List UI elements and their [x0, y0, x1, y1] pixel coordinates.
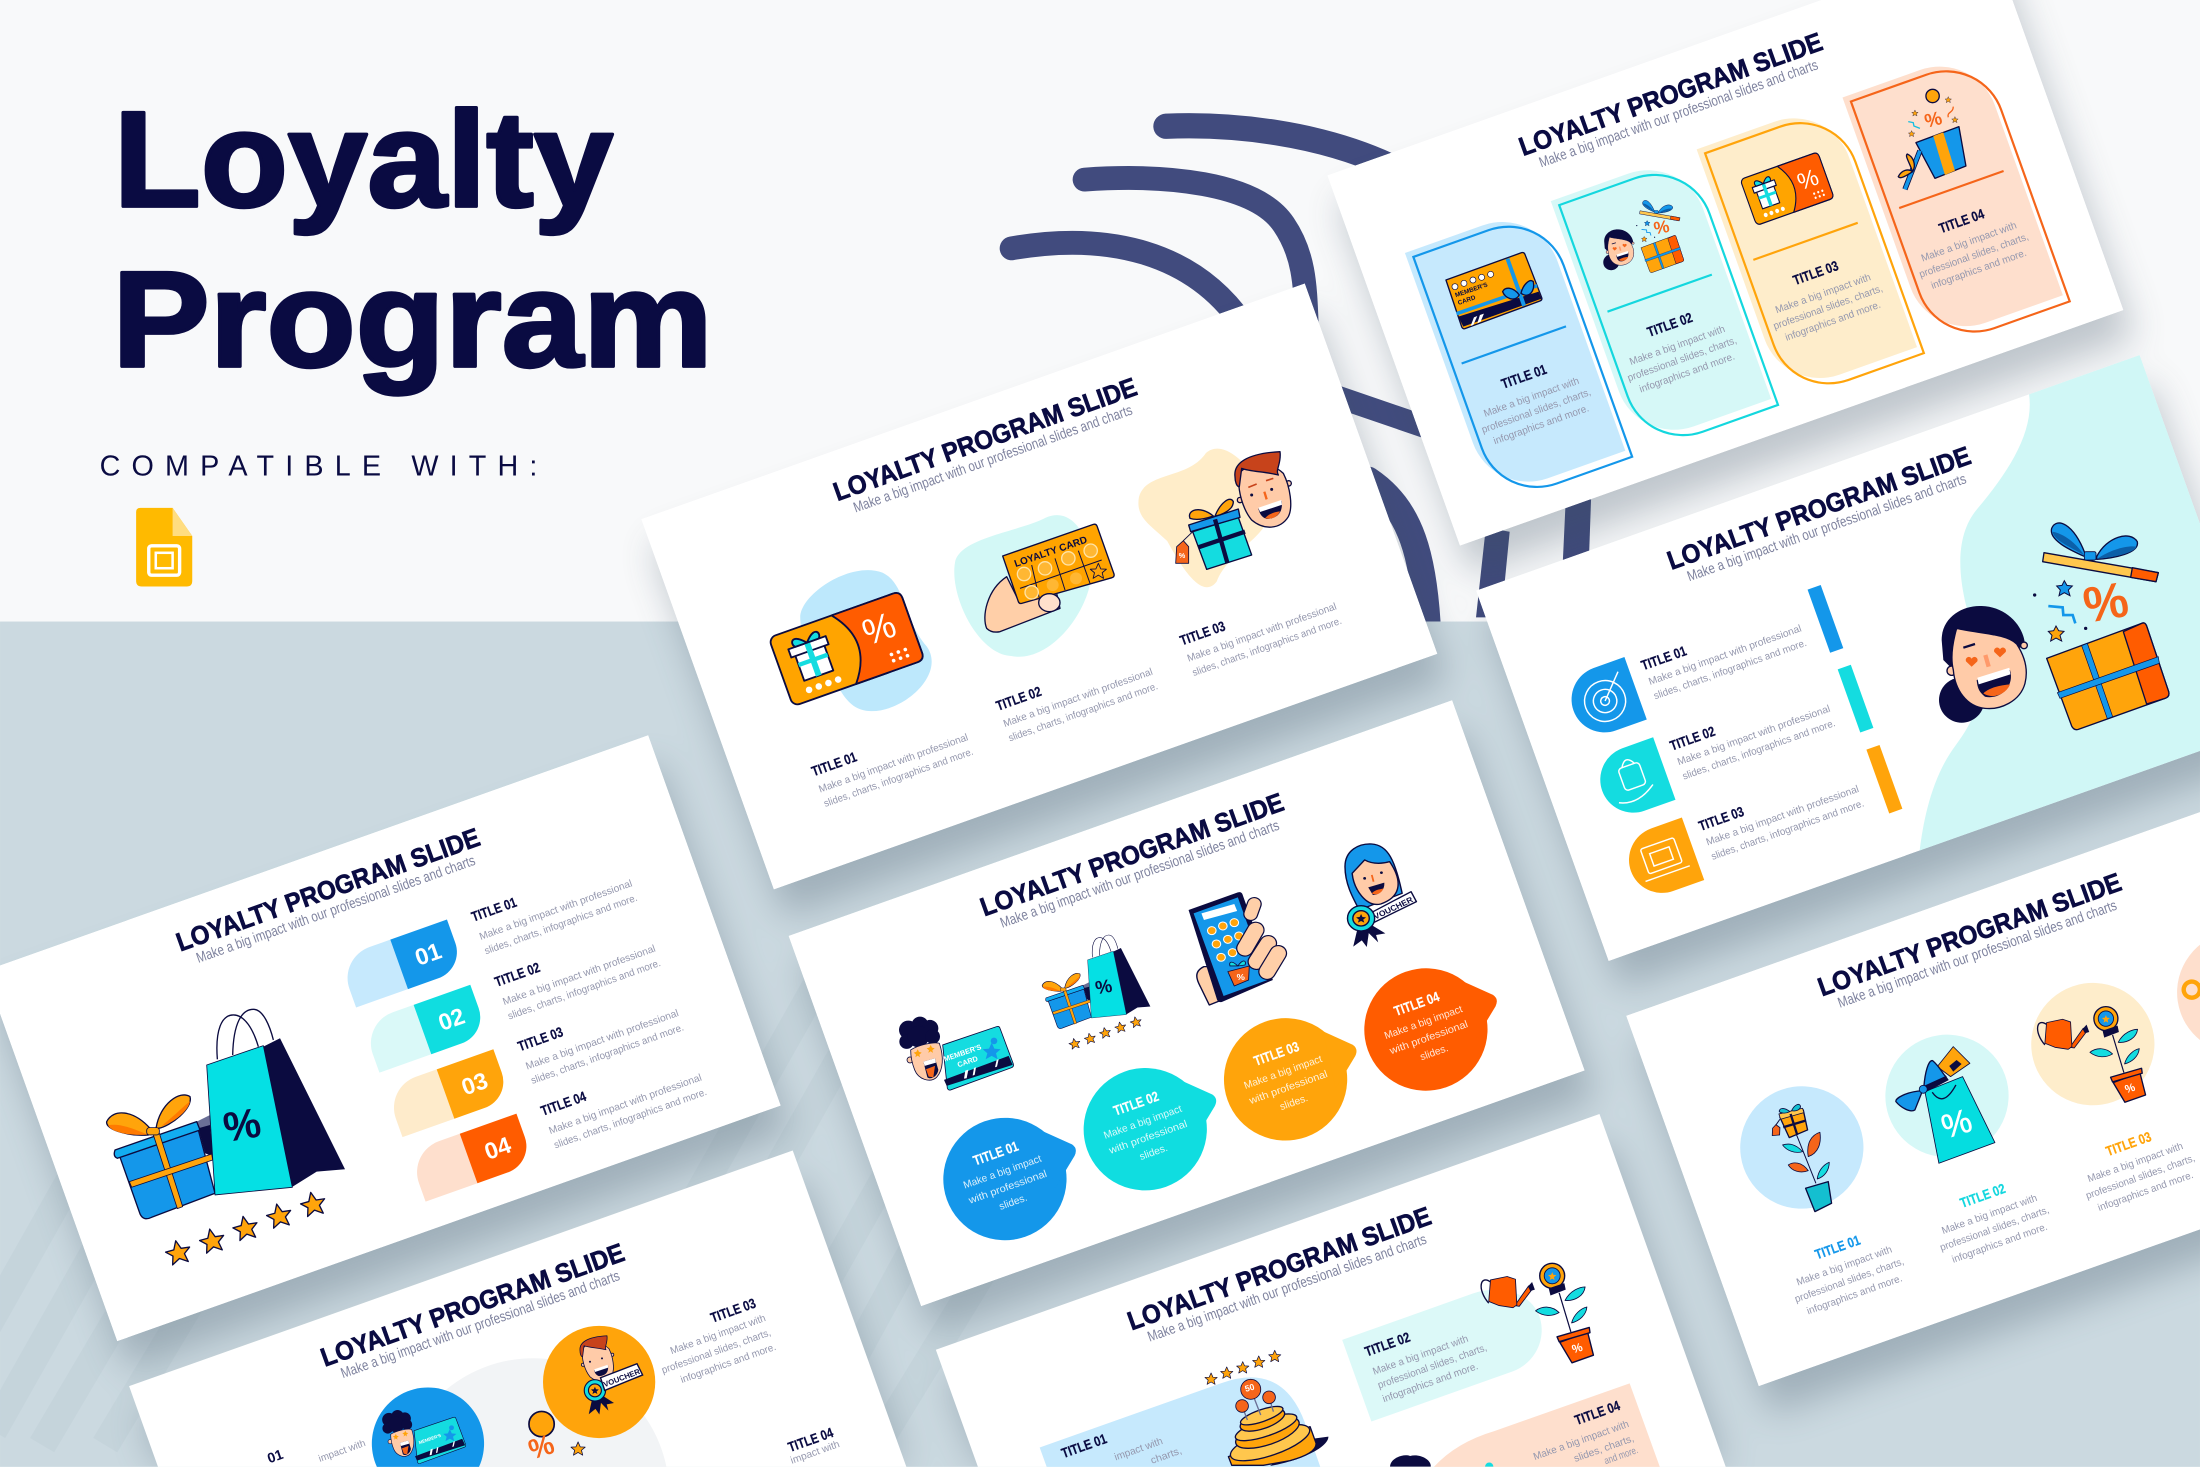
card 1: Make a big impact with	[1482, 376, 1581, 420]
heading: LOYALTY PROGRAM SLIDE	[1123, 1201, 1435, 1336]
panel: slide C list with woman and gift	[1476, 355, 2200, 961]
card 2	[1550, 170, 1780, 436]
icon: opening gift: %	[1923, 108, 1945, 133]
text: title 02: TITLE 02	[994, 683, 1044, 714]
list row 2: Make a big impact with professional	[501, 944, 657, 1008]
icon: member card: CARD	[1457, 294, 1477, 307]
card 3	[1696, 118, 1926, 384]
background: lower band	[0, 622, 2200, 1467]
text: title 01: slides, charts, infographics and more.	[823, 747, 975, 810]
icon: voucher man	[580, 1336, 614, 1381]
text: title 04	[784, 1423, 842, 1467]
text: title 01: professional slides, charts,	[1793, 1256, 1906, 1305]
card 2: TITLE 02	[1645, 309, 1695, 340]
illustration: watering can and flower	[1481, 1263, 1593, 1363]
bubble 1: TITLE 01	[971, 1138, 1021, 1168]
heading: Make a big impact with our professional slides and charts	[339, 1268, 622, 1382]
icon: member card: MEMBER'S	[1454, 282, 1489, 299]
bubble 1: with professional	[966, 1169, 1049, 1207]
row 1	[1561, 585, 1844, 742]
list row 4: 04	[481, 1132, 514, 1165]
card 3: professional slides, charts,	[1772, 284, 1884, 332]
heading: Make a big impact with our professional slides and charts	[194, 853, 478, 967]
bubble 1	[943, 1118, 1076, 1240]
panel 4 text: slides, charts,	[1573, 1433, 1636, 1465]
bubble 4: Make a big impact	[1383, 1004, 1464, 1042]
text: title 04: TITLE 04	[786, 1424, 836, 1455]
bubble 4: with professional	[1387, 1019, 1470, 1057]
circle 2	[1868, 1018, 2026, 1174]
ring fragment	[2181, 979, 2200, 1000]
bubble 3: TITLE 03	[1251, 1038, 1301, 1069]
bubble 3: slides.	[1279, 1093, 1310, 1113]
amber circle	[543, 1326, 655, 1438]
list row 1: Make a big impact with professional	[478, 878, 634, 943]
text: title 03: infographics and more.	[679, 1342, 778, 1386]
heading: Make a big impact with our professional slides and charts	[1836, 898, 2119, 1012]
heading: Make a big impact with our professional slides and charts	[1685, 471, 1969, 585]
icon: google slides	[136, 508, 192, 586]
icon: gift box with bow and percent	[2033, 523, 2169, 730]
heading: Make a big impact with our professional slides and charts	[851, 403, 1135, 516]
row 1: TITLE 01	[1639, 642, 1689, 673]
slide background	[936, 1114, 1726, 1467]
bubble 2: slides.	[1138, 1143, 1169, 1163]
text fragment: title 01: 01	[265, 1446, 285, 1466]
heading: LOYALTY PROGRAM SLIDE	[976, 787, 1288, 922]
compatible with label: COMPATIBLE WITH:	[100, 451, 537, 483]
row 3: Make a big impact with professional	[1705, 784, 1861, 848]
card 1: TITLE 01	[1499, 361, 1549, 392]
panel 2 text block: infographics and more.	[1381, 1361, 1480, 1405]
panel: slide E numbered list with bag	[0, 735, 781, 1341]
text: title 03: TITLE 03	[1178, 618, 1227, 648]
icon: phone in hand	[1189, 892, 1278, 1005]
list row 2: 02	[435, 1003, 468, 1036]
bubble 2	[1084, 1068, 1216, 1190]
text: title 01: TITLE 01	[1813, 1232, 1862, 1262]
row 3: slides, charts, infographics and more.	[1710, 798, 1866, 863]
heading: LOYALTY PROGRAM SLIDE	[172, 822, 484, 957]
illustration: gift and shopping bag with stars	[107, 1009, 345, 1266]
text fragment: title 01	[265, 1438, 367, 1466]
bubble 4: slides.	[1419, 1043, 1450, 1063]
title: Program	[112, 243, 713, 395]
illustration: watering can and flower	[2038, 1007, 2146, 1102]
mint blob	[1920, 355, 2200, 850]
panel 1 text: TITLE 01	[1059, 1430, 1109, 1461]
icon: hand holding loyalty card	[985, 524, 1114, 632]
illustration: gift and shopping bag with stars: %	[220, 1098, 264, 1151]
panel 4 text	[1524, 1396, 1640, 1467]
panel 4 text: and more.	[1603, 1445, 1640, 1467]
panel 1 text	[1059, 1408, 1183, 1467]
smiley and percent burst: %	[525, 1428, 558, 1465]
card 2: professional slides, charts,	[1626, 335, 1738, 384]
list row 3: Make a big impact with professional	[524, 1008, 680, 1072]
card 3: TITLE 03	[1791, 257, 1841, 288]
panel: slide B four cards	[1327, 0, 2123, 546]
circle 4	[2160, 914, 2200, 1071]
list row 2: slides, charts, infographics and more.	[507, 958, 662, 1022]
panel: slide A three icons	[641, 283, 1437, 890]
text: title 03: Make a big impact with	[2086, 1141, 2185, 1185]
illustration: cake and stars: 50	[1244, 1382, 1256, 1394]
text: title 02: Make a big impact with professional	[1002, 667, 1154, 730]
text: title 02: professional slides, charts,	[1939, 1205, 2051, 1254]
bubble 4	[1364, 968, 1497, 1091]
teal fragment	[1485, 1462, 1493, 1467]
text: title 03: infographics and more.	[2097, 1170, 2195, 1214]
icon: man with gift	[1176, 452, 1291, 569]
icon: gift box with bow and percent: %	[2079, 571, 2133, 634]
list row 4: TITLE 04	[539, 1088, 588, 1119]
text fragment: title 01: impact with	[317, 1438, 367, 1465]
text: title 02: Make a big impact with	[1940, 1193, 2039, 1237]
list row 3	[394, 1009, 684, 1137]
smiley and percent burst	[525, 1411, 585, 1465]
heading: Make a big impact with our professional slides and charts	[998, 818, 1282, 932]
circle 3	[2014, 966, 2172, 1122]
panel 1 text: impact with	[1113, 1436, 1165, 1463]
icon: member card	[1446, 253, 1542, 329]
bubble 1: Make a big impact	[962, 1154, 1043, 1191]
circle 1	[1740, 1086, 1864, 1209]
panel 2 text block: Make a big impact with	[1372, 1334, 1470, 1378]
icon: gift and shopping bag	[1042, 935, 1150, 1050]
heading: Make a big impact with our professional slides and charts	[1537, 58, 1820, 171]
icon: woman head	[1939, 606, 2027, 723]
row 1: slides, charts, infographics and more.	[1653, 638, 1808, 702]
card 2: infographics and more.	[1638, 351, 1736, 395]
bubble 3: with professional	[1247, 1069, 1329, 1107]
text: title 02	[1926, 1169, 2056, 1268]
list row 1: 01	[411, 938, 445, 971]
row 1: Make a big impact with professional	[1647, 624, 1803, 688]
icon: hand holding loyalty card: LOYALTY CARD	[1013, 535, 1089, 570]
row 3	[1619, 745, 1903, 902]
icon: opening gift	[1898, 89, 1966, 189]
card 1	[1405, 222, 1634, 488]
heading: Make a big impact with our professional slides and charts	[1146, 1232, 1429, 1346]
illustration: bag with bow: %	[1937, 1102, 1976, 1146]
heading: LOYALTY PROGRAM SLIDE	[1814, 867, 2125, 1002]
panel 1	[1040, 1377, 1320, 1467]
card 4: TITLE 04	[1937, 205, 1986, 236]
icon: man with member card: MEMBER'S	[418, 1433, 442, 1445]
heading: LOYALTY PROGRAM SLIDE	[1663, 440, 1975, 576]
bubble 3	[1224, 1018, 1356, 1140]
background: top band	[0, 0, 2200, 622]
blob behind hand	[954, 515, 1090, 657]
list row 3: slides, charts, infographics and more.	[530, 1023, 685, 1087]
card 3: Make a big impact with	[1774, 272, 1873, 316]
icon: voucher rosette	[584, 1364, 643, 1415]
row 2: TITLE 02	[1668, 723, 1717, 754]
icon: man with member card	[899, 1017, 1013, 1090]
text: title 02: slides, charts, infographics and more.	[1007, 681, 1160, 744]
text: title 02: infographics and more.	[1951, 1222, 2049, 1266]
icon: discount card on blue blob	[770, 570, 932, 712]
text: title 03: Make a big impact with	[669, 1313, 768, 1357]
title	[112, 83, 713, 395]
panel: slide G tinted panels	[936, 1114, 1726, 1467]
card 3: %	[1794, 164, 1822, 195]
text: title 03: professional slides, charts,	[660, 1328, 773, 1376]
illustration: cake and stars	[1205, 1350, 1328, 1467]
text: title 03	[648, 1293, 778, 1391]
bubble 4: TITLE 04	[1392, 988, 1442, 1019]
illustration: gift plant	[1772, 1104, 1832, 1212]
bubble 2: with professional	[1107, 1119, 1189, 1157]
card 1: infographics and more.	[1492, 403, 1591, 447]
panel 4 text: TITLE 04	[1572, 1397, 1622, 1428]
panel: slide D speech bubbles	[789, 700, 1585, 1306]
card 4: professional slides, charts,	[1918, 232, 2030, 281]
icon: man with member card	[382, 1410, 466, 1464]
text: title 03: Make a big impact with professional	[1186, 601, 1338, 665]
bubble 2: TITLE 02	[1111, 1088, 1161, 1119]
icon: voucher woman	[1345, 844, 1416, 947]
title: Loyalty	[114, 83, 613, 235]
icon: man with gift: %	[1179, 551, 1186, 560]
central grey circle	[400, 1358, 666, 1467]
text: title 01: Make a big impact with	[1795, 1244, 1894, 1288]
card 1: professional slides, charts,	[1480, 387, 1593, 436]
bubble 2: Make a big impact	[1102, 1104, 1184, 1142]
list row 1: slides, charts, infographics and more.	[483, 893, 639, 957]
panel 4	[1434, 1383, 1660, 1467]
icon: phone in hand: %	[1237, 972, 1245, 982]
list row 1	[348, 879, 638, 1008]
icon: discount card on blue blob: %	[857, 604, 901, 653]
text: title 04: impact with	[789, 1439, 842, 1467]
list row 1: TITLE 01	[469, 894, 519, 925]
list row 3: TITLE 03	[515, 1023, 565, 1054]
icon: woman and gift	[1603, 200, 1684, 273]
heading: LOYALTY PROGRAM SLIDE	[1515, 27, 1826, 162]
list row 2: TITLE 02	[492, 959, 542, 990]
list row 4: Make a big impact with professional	[548, 1073, 703, 1137]
icon: man with member card: MEMBER'S	[943, 1042, 983, 1064]
row 2: slides, charts, infographics and more.	[1681, 718, 1837, 783]
list row 2	[371, 944, 660, 1072]
heading: LOYALTY PROGRAM SLIDE	[829, 372, 1141, 507]
text: title 03: TITLE 03	[2104, 1128, 2154, 1159]
head fragment	[1390, 1455, 1431, 1467]
blob behind man	[1138, 448, 1264, 588]
bubble 1: slides.	[998, 1193, 1029, 1213]
row 2	[1590, 665, 1874, 822]
bubble 3: Make a big impact	[1243, 1054, 1324, 1092]
card 3: infographics and more.	[1784, 300, 1882, 344]
icon: voucher woman: VOUCHER	[1372, 895, 1415, 921]
card 4	[1842, 66, 2072, 333]
panel 1 text: charts,	[1149, 1446, 1183, 1467]
text: title 03: professional slides, charts,	[2085, 1153, 2197, 1202]
blue circle	[372, 1387, 484, 1467]
row 2: Make a big impact with professional	[1676, 704, 1832, 768]
card 4: infographics and more.	[1930, 248, 2028, 292]
panel 2 text block: professional slides, charts,	[1376, 1343, 1489, 1391]
panel 4 text: Make a big impact with	[1532, 1419, 1631, 1463]
text: title 03	[2072, 1117, 2200, 1216]
panel 2 text block	[1342, 1275, 1554, 1422]
decorative curved lines	[1012, 126, 1591, 645]
text: title 03: slides, charts, infographics and more.	[1191, 616, 1343, 679]
list row 4: slides, charts, infographics and more.	[553, 1087, 709, 1151]
heading: LOYALTY PROGRAM SLIDE	[317, 1237, 628, 1373]
icon: voucher rosette: VOUCHER	[602, 1367, 642, 1389]
card 2: Make a big impact with	[1628, 324, 1727, 368]
text: title 01: infographics and more.	[1806, 1273, 1904, 1317]
list row 4	[417, 1073, 706, 1202]
text: title 03: TITLE 03	[708, 1295, 758, 1326]
text: title 01	[1781, 1220, 1911, 1320]
icon: gift and shopping bag: %	[1093, 975, 1114, 998]
icon: woman and gift: %	[1652, 216, 1671, 238]
slide background	[129, 1150, 906, 1467]
illustration: watering can and flower: %	[1570, 1341, 1585, 1356]
panel 2 text block: TITLE 02	[1363, 1329, 1412, 1359]
row 3: TITLE 03	[1696, 803, 1746, 834]
illustration: bag with bow	[1896, 1047, 1995, 1163]
text: title 02: TITLE 02	[1958, 1180, 2008, 1211]
text: title 01: TITLE 01	[809, 748, 859, 779]
panel: slide H circles with plants	[1626, 780, 2200, 1386]
panel: slide F circular layout	[129, 1150, 906, 1467]
text: title 01: Make a big impact with professional	[817, 732, 970, 795]
illustration: watering can and flower: %	[2124, 1082, 2137, 1096]
icon: man with member card: CARD	[956, 1054, 979, 1069]
card 4: Make a big impact with	[1920, 220, 2019, 264]
list row 3: 03	[458, 1067, 491, 1100]
